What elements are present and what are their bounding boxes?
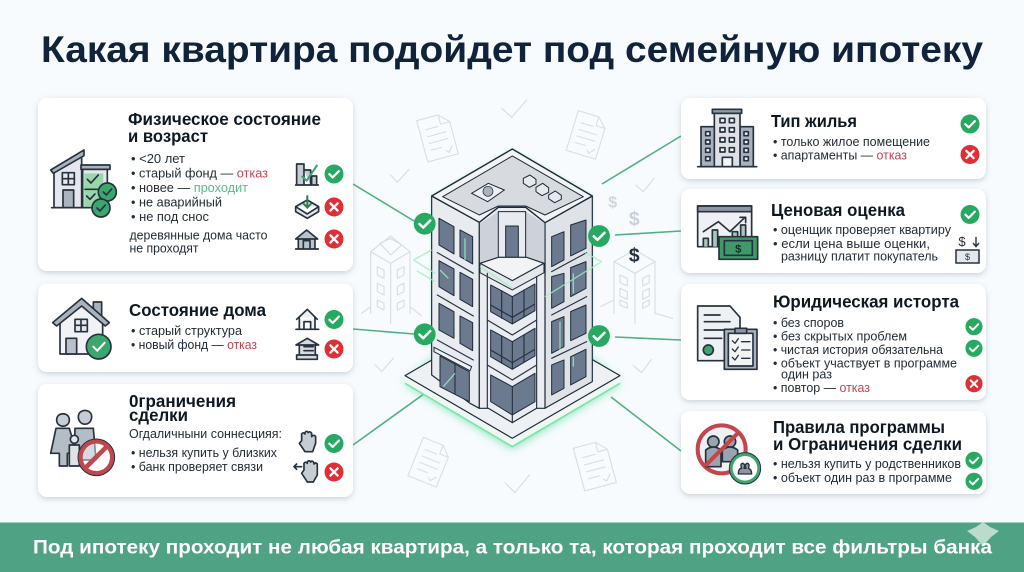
status badges [965,452,983,490]
bullet list: • чистая история обязательна [773,342,944,357]
icon: chart and banknote [698,206,758,259]
icon: family with prohibition sign [51,410,115,476]
panel: ограничения сделки [38,384,353,497]
icon: chart and banknote: $ [735,243,742,255]
heading: Ценовая оценка [771,200,905,220]
heading: Тип жилья [771,111,857,131]
banner text: Под ипотеку проходит не любая квартира, а только та, которая проходит все фильтры банка [33,536,992,558]
title: Какая квартира подойдет под семейную ипотеку [41,29,983,70]
bullet list: • если цена выше оценки, [773,236,930,251]
bullet list: • без скрытых проблем [773,328,907,344]
bullet list: один раз [781,366,832,382]
status badges [324,434,344,482]
roof [432,149,592,223]
bullet list [773,134,930,162]
left and right faces [432,196,479,408]
background decorations: documents, checks, ghost buildings: $ [629,209,640,230]
note: деревянные дома часто [130,228,268,242]
bullet list: • банк проверяет связи [131,459,263,474]
background decorations: documents, checks, ghost buildings: $ [608,194,617,211]
bullet list: • объект один раз в программе [773,470,952,485]
panel: тип жилья [681,98,986,179]
bullet list: • старый структура [131,323,243,338]
bullet list: • не аварийный [131,194,222,210]
status badges [965,318,983,392]
bullet list: • повтор — отказ [773,380,870,395]
base glow [405,360,620,448]
heading [129,391,236,425]
icon: house with checks [51,150,116,217]
right face windows [552,220,586,395]
bullet list [773,315,957,395]
bullet list: • нельзя купить у родственников [773,456,961,471]
icon: house with check [53,298,111,359]
heading: Состояние дома [129,300,266,320]
icon: sparkle [967,522,999,546]
bullet list: • нельзя купить у близких [131,445,277,460]
bottom banner [0,522,1024,572]
central isometric building [405,149,620,448]
connector lines [353,136,681,451]
bullet list [773,222,951,264]
panel: состояние дома [38,284,353,372]
heading: Правила программы [773,417,945,437]
background decorations: documents, checks, ghost buildings: $ [629,245,640,266]
left face windows [439,218,473,351]
bullet list: • объект участвует в программе [773,356,957,370]
status badges [324,164,344,248]
bullet list: • апартаменты — отказ [773,148,907,162]
background decorations: documents, checks, ghost buildings [362,100,673,493]
balconies [480,257,544,281]
panel: ценовая оценка [681,189,986,273]
bullet list: • без споров [773,315,844,330]
note [130,228,268,256]
base plate [405,313,620,447]
building check badges [414,213,610,347]
icon: price difference banknote: $ [965,252,970,262]
bullet list: разницу платит покупатель [781,248,938,264]
small icons [296,164,319,249]
bullet list [131,151,268,224]
panel: юридическая история [681,284,986,400]
icon: price difference banknote [956,234,979,263]
note: не проходят [130,240,199,256]
status badge [960,205,980,224]
bullet list: • старый фонд — отказ [131,166,268,180]
heading: и Ограничения сделки [773,434,962,454]
bullet list: • не под снос [131,209,209,224]
heading: и возраст [128,126,208,146]
icon: apartment block [698,109,757,167]
panel: правила программы [681,411,986,494]
heading: сделки [129,405,188,425]
status badges [324,310,344,358]
bullet list: • новее — проходит [131,180,248,195]
heading: 0граничения [129,391,236,411]
bullet list [131,445,277,474]
heading [773,417,962,454]
small icons [296,309,319,359]
heading [128,109,321,146]
center column [479,207,545,423]
bullet list: • только жилое помещение [773,134,930,149]
bullet list: • <20 лет [131,151,185,166]
bullet list [773,456,961,485]
heading: Физическое состояние [128,109,321,129]
status badges [960,114,980,164]
bullet list [131,323,257,352]
panel: физическое состояние и возраст [38,98,353,271]
small icons [294,431,317,482]
heading: Юридическая исторта [773,292,959,312]
subheading: Огдаличныни соннесцияя: [129,426,282,441]
glow accents [413,238,602,387]
icon: prohibited relatives [698,425,761,484]
icon: price difference banknote: $ [958,234,966,249]
bullet list: • новый фонд — отказ [131,337,257,352]
icon: document and clipboard [698,306,757,369]
bullet list: • оценщик проверяет квартиру [773,222,951,237]
